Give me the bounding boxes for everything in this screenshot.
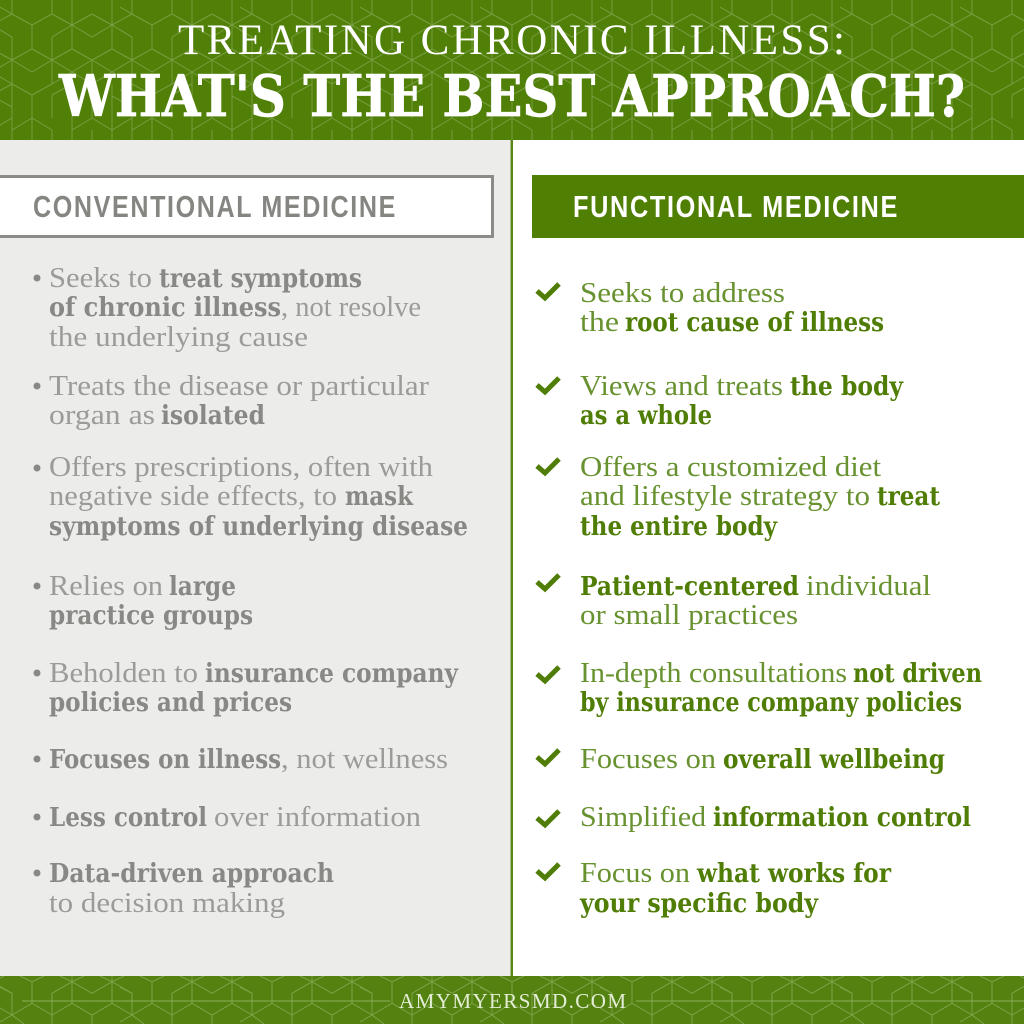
item: diet and lifestyle: Offers a customized diet	[580, 452, 881, 483]
item: root cause: Seeks to address	[580, 278, 785, 309]
bullet: treat symptoms: of chronic illness	[49, 292, 281, 323]
item: overall wellbeing: overall wellbeing	[723, 744, 945, 775]
bullet: illness: Focuses on illness	[49, 744, 281, 775]
item: what works	[537, 858, 892, 919]
item: diet and lifestyle	[537, 452, 941, 542]
bullet: isolated: organ as	[49, 400, 155, 431]
conventional medicine list	[34, 263, 468, 919]
bullet: prescriptions: negative side effects, to	[49, 481, 337, 512]
item: information control: information control	[713, 802, 971, 833]
bullet: isolated: isolated	[161, 400, 265, 431]
bullet: prescriptions	[34, 452, 468, 542]
item: information control	[537, 802, 971, 833]
item: patient-centered: Patient-centered	[580, 571, 799, 602]
bullet: data-driven	[34, 858, 334, 919]
heading: conventional medicine	[0, 176, 492, 236]
bullet: less control: Less control	[49, 802, 207, 833]
bullet: insurance: policies and prices	[49, 687, 292, 718]
bullet: prescriptions: Offers prescriptions, often with	[49, 452, 433, 483]
item: root cause: root cause of illness	[625, 307, 884, 338]
heading: conventional medicine: CONVENTIONAL MEDICINE	[33, 189, 397, 224]
item: overall wellbeing	[537, 744, 945, 775]
center divider	[510, 140, 513, 976]
item: root cause	[537, 278, 884, 338]
bullet: data-driven: to decision making	[49, 888, 285, 919]
item: root cause: the	[580, 307, 619, 338]
header band with hexagon pattern	[0, 0, 1024, 140]
item: diet and lifestyle: the entire body	[580, 511, 778, 542]
footer website: AMYMYERSMD.COM	[399, 989, 626, 1013]
item: patient-centered: or small practices	[580, 600, 798, 631]
bullet: treat symptoms	[34, 263, 421, 353]
bullet: large practice groups: practice groups	[49, 600, 253, 631]
item: what works: your specific body	[579, 888, 819, 919]
item: patient-centered	[537, 571, 931, 631]
bullet: treat symptoms: , not resolve	[281, 292, 421, 323]
item: consultations: not driven	[853, 658, 982, 689]
bullet: less control	[34, 802, 421, 833]
bullet: treat symptoms: treat symptoms	[159, 263, 362, 294]
functional medicine list	[537, 278, 982, 919]
bullet: isolated: Treats the disease or particular	[49, 371, 430, 402]
bullet: treat symptoms: the underlying cause	[49, 322, 308, 353]
item: what works: Focus on	[580, 858, 690, 889]
item: body as a whole: as a whole	[580, 400, 712, 431]
item: overall wellbeing: Focuses on	[580, 744, 716, 775]
item: consultations	[537, 658, 982, 718]
item: what works: what works for	[696, 858, 892, 889]
item: consultations: In-depth consultations	[580, 658, 847, 689]
bullet: less control: over information	[214, 802, 421, 833]
heading: functional medicine: FUNCTIONAL MEDICINE	[573, 189, 899, 224]
title: TREATING CHRONIC ILLNESS:	[178, 17, 845, 64]
item: diet and lifestyle: and lifestyle strategy to	[580, 481, 870, 512]
heading: functional medicine	[532, 175, 1024, 238]
item: diet and lifestyle: treat	[877, 481, 941, 512]
item: body as a whole: the body	[790, 371, 904, 402]
bullet: data-driven: Data-driven approach	[49, 858, 334, 889]
bullet: large practice groups: large	[169, 571, 236, 602]
item: patient-centered: individual	[806, 571, 931, 602]
item: information control: Simplified	[580, 802, 706, 833]
bullet: illness	[34, 744, 448, 775]
bullet: large practice groups: Relies on	[49, 571, 163, 602]
bullet: prescriptions: mask	[345, 481, 414, 512]
bullet: treat symptoms: Seeks to	[49, 263, 152, 294]
bullet: insurance: insurance company	[205, 658, 459, 689]
bullet: insurance: Beholden to	[49, 658, 198, 689]
bullet: prescriptions: symptoms of underlying disease	[49, 511, 468, 542]
footer band with hexagon pattern	[0, 976, 1024, 1024]
panel: conventional medicine background	[0, 140, 510, 976]
item: body as a whole	[537, 371, 904, 431]
bullet: isolated	[34, 371, 430, 431]
bullet: illness: , not wellness	[281, 744, 448, 775]
title	[58, 17, 965, 130]
bullet: large practice groups	[34, 571, 253, 631]
item: body as a whole: Views and treats	[580, 371, 783, 402]
bullet: insurance	[34, 658, 459, 718]
item: consultations: by insurance company policies	[580, 687, 962, 718]
